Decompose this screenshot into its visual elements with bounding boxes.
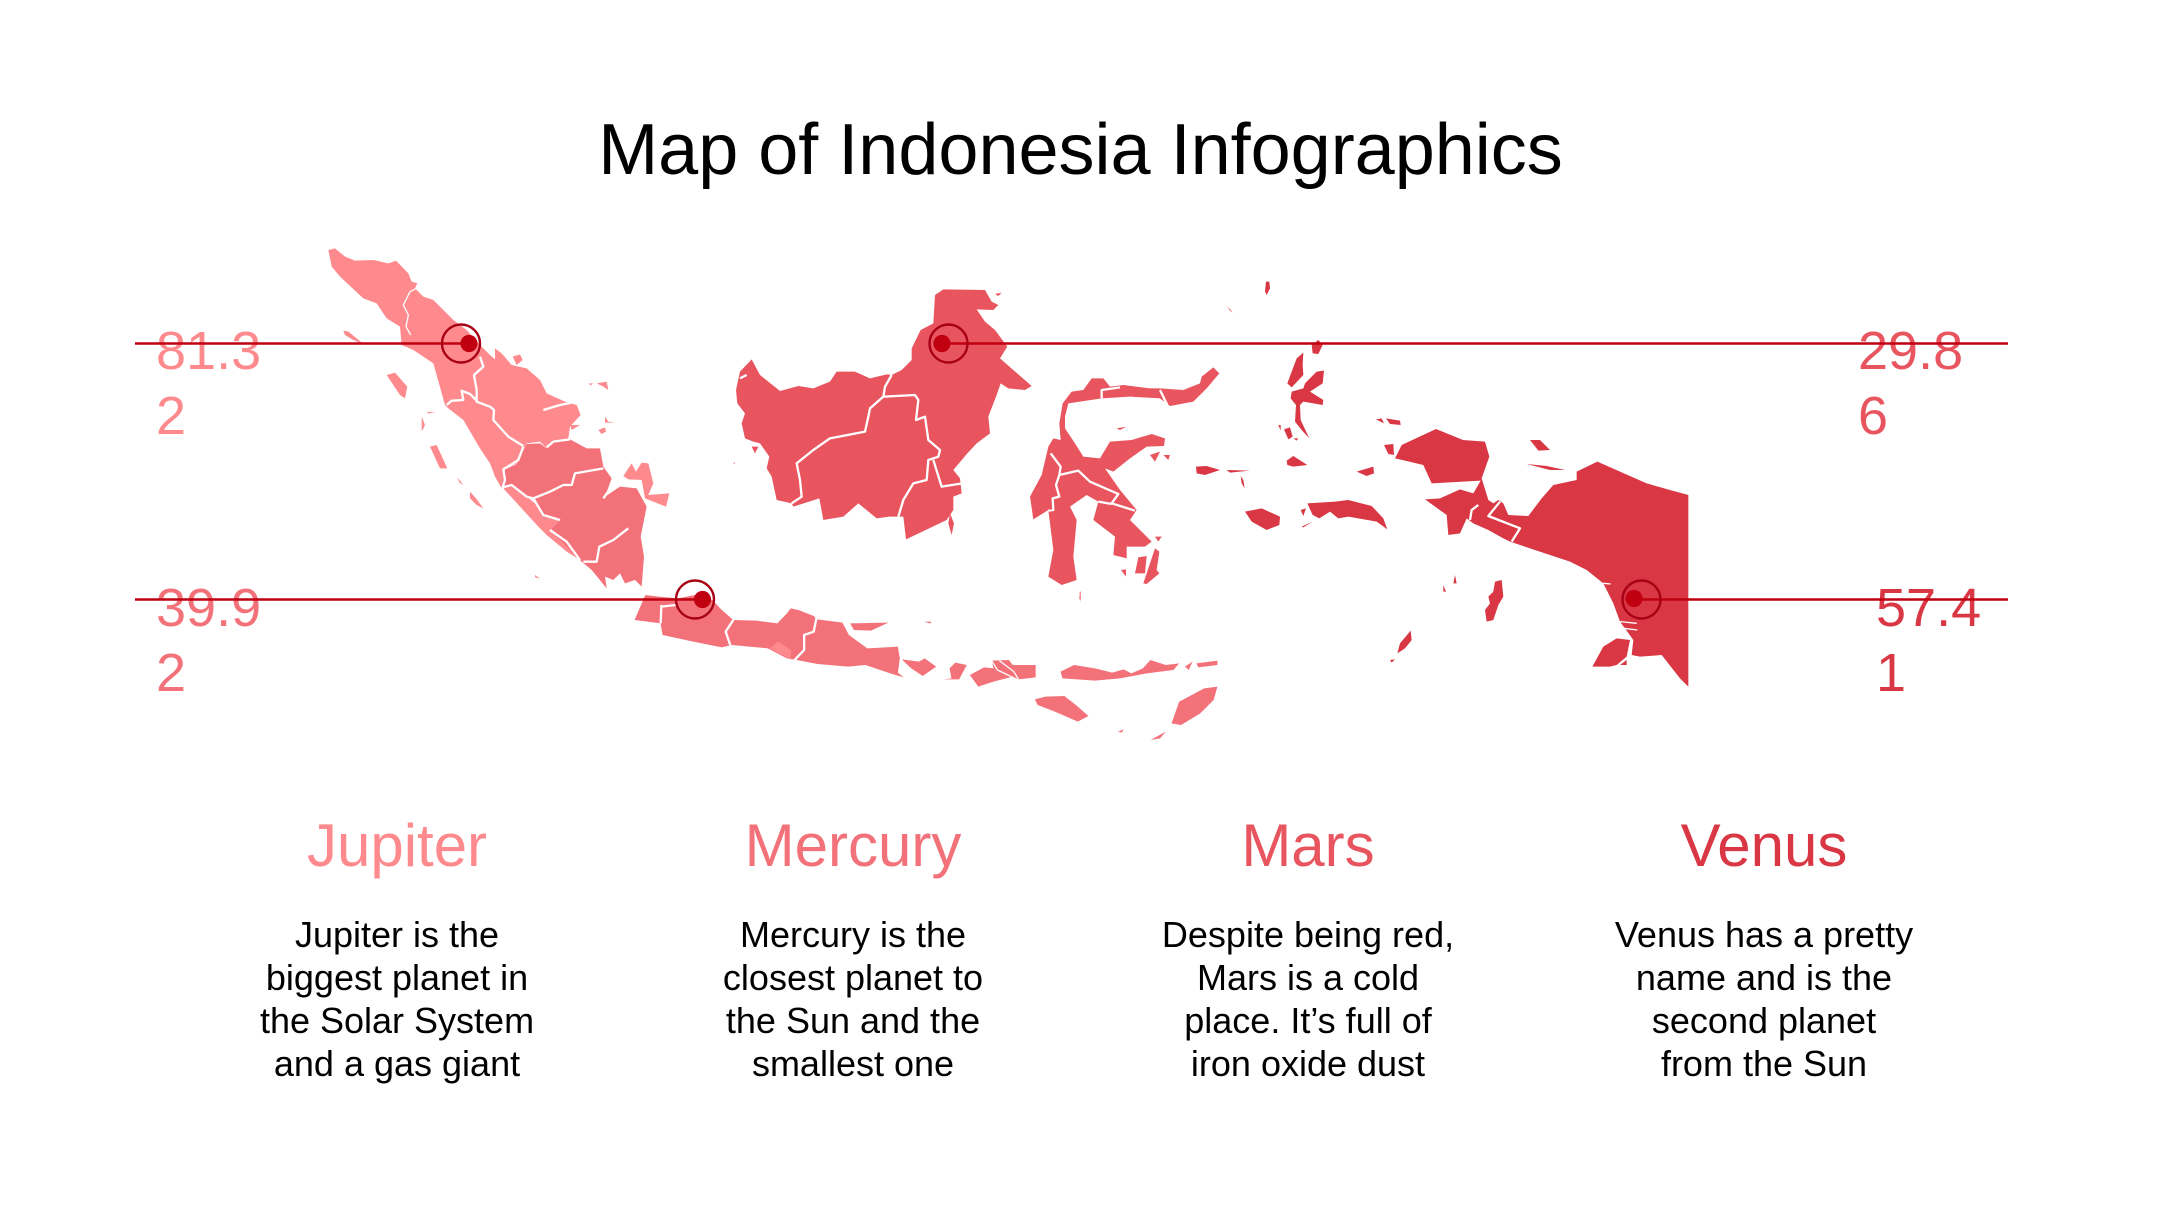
leader lines <box>135 344 2008 600</box>
column: Mercury: smallest one <box>752 1043 954 1084</box>
region: Maluku <box>1196 282 1401 530</box>
column: Mars: place. It’s full of <box>1184 1000 1432 1041</box>
region: Sulawesi <box>1030 367 1219 599</box>
title: Map of Indonesia Infographics <box>598 110 1563 190</box>
column: Mars: Despite being red, <box>1162 914 1454 955</box>
column: Jupiter: the Solar System <box>260 1000 534 1041</box>
column: Jupiter: biggest planet in <box>266 957 528 998</box>
column: Mercury: Mercury <box>745 812 961 879</box>
column: Venus: name and is the <box>1636 957 1892 998</box>
marker: Mercury <box>676 580 714 618</box>
region: Sumatra <box>328 248 669 588</box>
marker: Venus <box>1622 580 1660 618</box>
region: Java and Lesser Sunda <box>635 592 1217 740</box>
column: Mars <box>1162 812 1454 1084</box>
column: Jupiter <box>260 812 534 1084</box>
column: Mercury: closest planet to <box>723 957 983 998</box>
column: Venus: second planet <box>1652 1000 1876 1041</box>
column: Mercury: the Sun and the <box>726 1000 980 1041</box>
column: Mars: Mars <box>1241 812 1375 879</box>
region: Kalimantan <box>733 289 1032 539</box>
marker: Mars <box>930 324 968 362</box>
column: Jupiter: and a gas giant <box>274 1043 520 1084</box>
column: Mars: Mars is a cold <box>1197 957 1419 998</box>
column: Venus: Venus <box>1681 812 1847 879</box>
value: Mercury 39.92: 39.92 <box>156 578 261 703</box>
column: Mercury <box>723 812 983 1084</box>
column: Venus: Venus has a pretty <box>1615 914 1913 955</box>
marker: Jupiter <box>442 324 480 362</box>
value: Mars 29.86: 29.86 <box>1858 321 1963 446</box>
region: Papua <box>1390 429 1688 687</box>
value: Jupiter 81.32: 81.32 <box>156 321 261 446</box>
column: Venus: from the Sun <box>1661 1043 1867 1084</box>
column: Mars: iron oxide dust <box>1191 1043 1425 1084</box>
value: Venus 57.41: 57.41 <box>1876 578 1981 703</box>
column: Mercury: Mercury is the <box>740 914 966 955</box>
column: Jupiter: Jupiter <box>307 812 487 879</box>
column: Jupiter: Jupiter is the <box>295 914 499 955</box>
column: Venus <box>1615 812 1913 1084</box>
